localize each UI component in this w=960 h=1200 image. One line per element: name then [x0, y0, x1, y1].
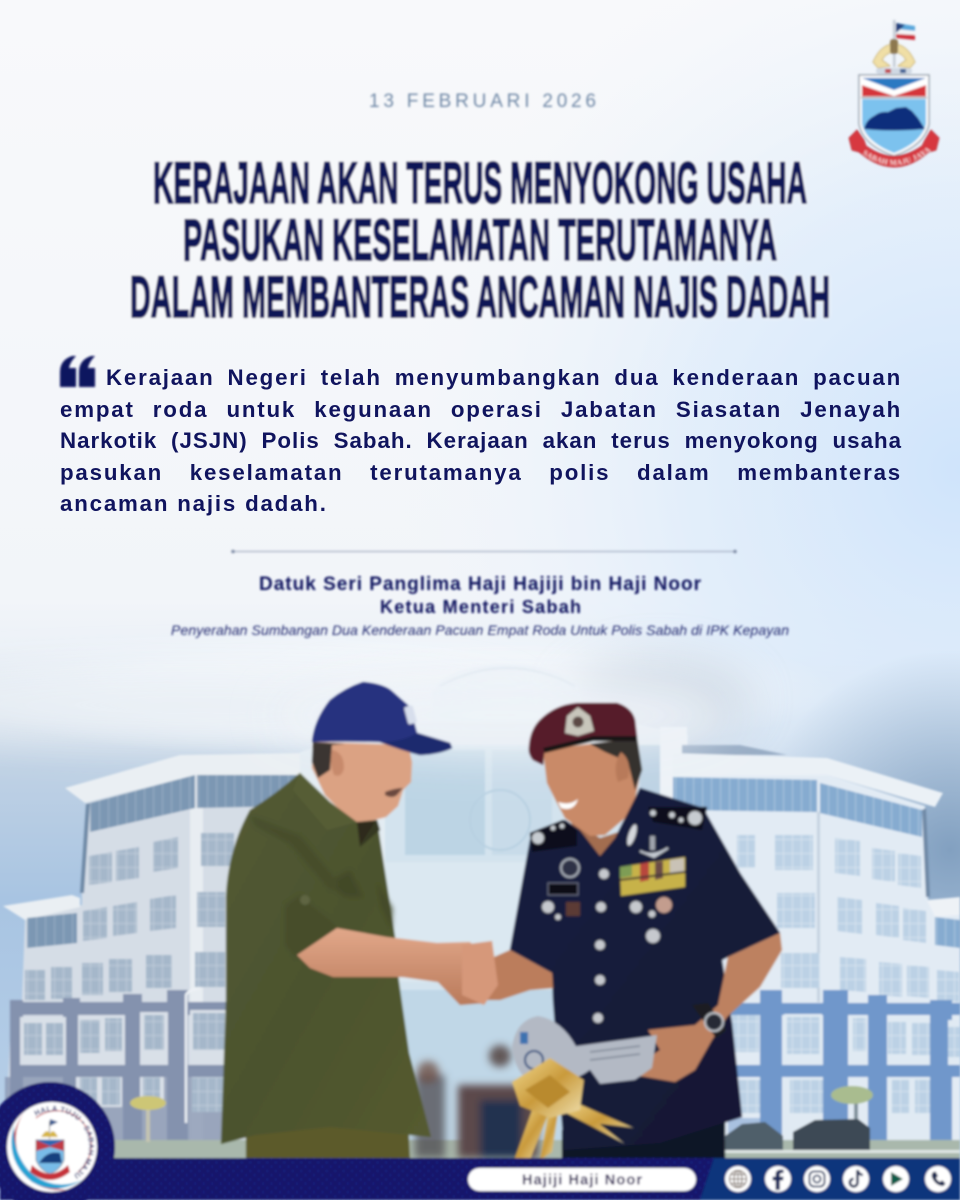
quote body text: pasukan keselamatan terutamanya polis dalam membanteras — [60, 460, 902, 484]
name pill — [468, 1168, 696, 1191]
quote body text: ancaman najis dadah. — [60, 491, 328, 516]
icon: facebook — [765, 1166, 791, 1192]
icon: instagram — [804, 1166, 830, 1192]
shoulder boards — [530, 820, 577, 852]
headline — [130, 151, 830, 330]
trousers — [562, 1120, 725, 1160]
shirt — [221, 773, 431, 1144]
medal ribbons — [620, 857, 685, 896]
beret — [529, 703, 637, 765]
quotation mark — [60, 356, 95, 387]
lower blue storeys left — [5, 990, 230, 1140]
forearm — [297, 928, 492, 1005]
dome — [432, 664, 582, 735]
wreath — [876, 68, 912, 74]
tunic — [510, 788, 780, 1150]
date: 13 FEBRUARI 2026 — [369, 91, 596, 112]
name tag and badge — [548, 883, 578, 895]
photo: police officer — [462, 703, 782, 1160]
arms holding flag — [873, 44, 915, 68]
shield — [859, 75, 929, 156]
trousers — [246, 1120, 410, 1160]
ribbon tails — [560, 1098, 634, 1144]
attribution — [171, 574, 789, 638]
social icons — [725, 1166, 951, 1192]
pocket flaps and sleeve folds — [250, 815, 393, 958]
footer bar — [0, 1158, 960, 1200]
ceremonial key with gold bow — [512, 1016, 657, 1160]
haze over building top — [270, 677, 730, 753]
palm trees — [130, 1086, 873, 1142]
icon: globe — [725, 1166, 751, 1192]
cap — [312, 682, 452, 755]
icon: phone — [925, 1166, 951, 1192]
flag — [893, 20, 915, 67]
left wing — [0, 753, 960, 1158]
blurred bystanders — [415, 1045, 538, 1158]
right forearm — [628, 933, 782, 1082]
parked cars — [725, 1119, 870, 1150]
mini crest — [30, 1119, 70, 1180]
round campaign badge — [0, 1080, 116, 1200]
quote body text: Kerajaan Negeri telah menyumbangkan dua kenderaan pacuan — [106, 365, 902, 390]
right wing — [673, 753, 960, 1145]
ground strip — [0, 1140, 960, 1158]
watch — [692, 1003, 726, 1038]
pocket pins — [542, 869, 672, 1023]
attribution: Penyerahan Sumbangan Dua Kenderaan Pacuan Empat Roda Untuk Polis Sabah di IPK Kepayan — [171, 622, 789, 638]
motto scroll: SABAH MAJU JAYA — [862, 146, 932, 167]
swoosh — [12, 1112, 66, 1190]
attribution: Datuk Seri Panglima Haji Hajiji bin Haji Noor — [259, 574, 702, 595]
neck and face — [570, 790, 650, 860]
head — [312, 742, 412, 825]
quote body text: empat roda untuk kegunaan operasi Jabatan Siasatan Jenayah — [60, 396, 902, 422]
photo: man in olive shirt — [221, 682, 492, 1160]
name pill: Hajiji Haji Noor — [522, 1172, 642, 1188]
central glass tower — [300, 722, 787, 1140]
divider — [231, 550, 737, 553]
motto scroll — [847, 128, 941, 170]
quote body text: Narkotik (JSJN) Polis Sabah. Kerajaan akan terus menyokong usaha — [60, 428, 902, 453]
collar — [293, 773, 357, 830]
icon: play — [883, 1166, 909, 1192]
icon: tiktok — [843, 1166, 869, 1192]
attribution: Ketua Menteri Sabah — [380, 597, 581, 617]
far left wing — [5, 905, 82, 1145]
left forearm — [482, 950, 553, 1000]
quote body text — [60, 365, 902, 516]
state crest — [847, 19, 941, 170]
lamp post — [186, 988, 200, 1123]
